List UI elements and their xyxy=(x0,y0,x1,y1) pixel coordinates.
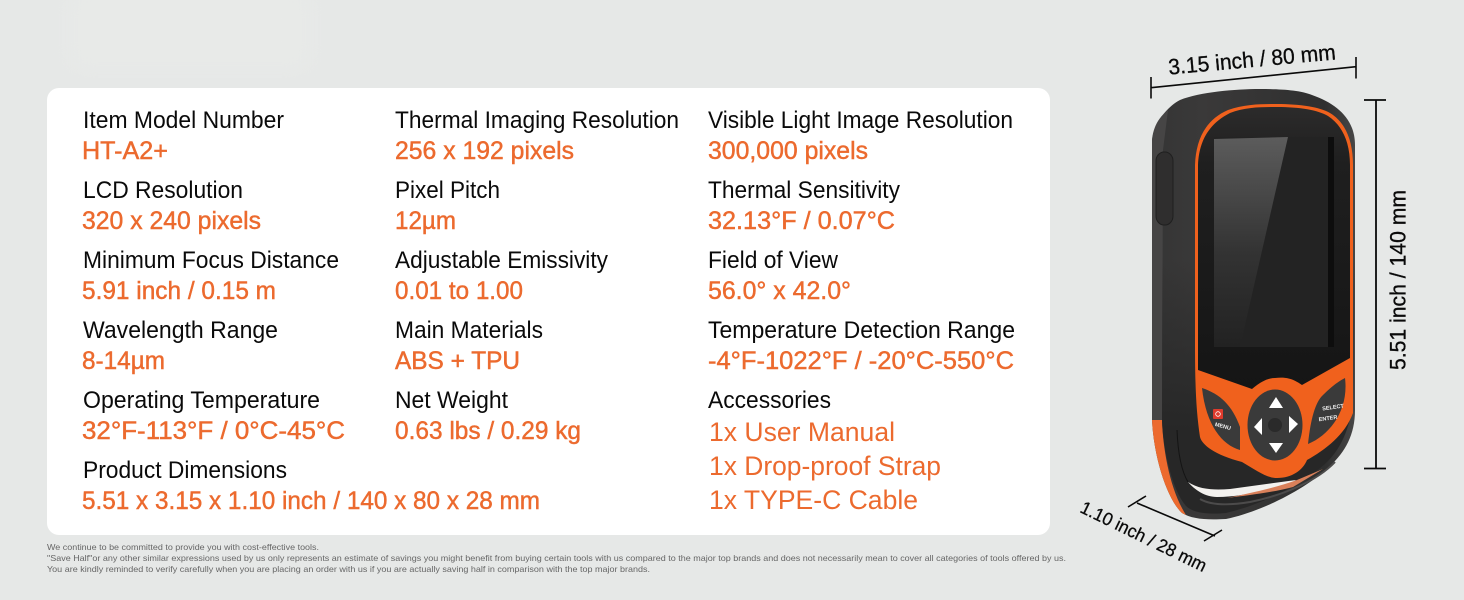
spec: temperature detection range: Temperature Detection Range xyxy=(708,317,1015,344)
side port cover xyxy=(1156,152,1173,225)
disclaimer text: "Save Half"or any other similar expressions used by us only represents an estimate of savings you might benefit from buying certain tools with us compared to the major top brands and does not necessarily mean to cover all categories of tools offered by us. xyxy=(47,553,1066,563)
spec: operating temperature: 32°F-113°F / 0°C-45°C xyxy=(82,417,345,445)
spec: operating temperature: Operating Temperature xyxy=(83,387,320,414)
spec: adjustable emissivity: 0.01 to 1.00 xyxy=(395,277,523,305)
spec: net weight: Net Weight xyxy=(395,387,508,414)
spec: adjustable emissivity xyxy=(395,247,608,305)
spec: adjustable emissivity: Adjustable Emissivity xyxy=(395,247,608,274)
black face xyxy=(1198,107,1350,389)
spec: main materials xyxy=(395,317,543,375)
dimension: depth: 1.10 inch / 28 mm xyxy=(1077,497,1210,576)
spec: visible light image resolution: Visible Light Image Resolution xyxy=(708,107,1013,134)
lower front shell xyxy=(1162,260,1355,514)
spec: LCD resolution xyxy=(82,177,261,235)
spec: thermal imaging resolution: Thermal Imaging Resolution xyxy=(395,107,679,134)
device body xyxy=(1152,89,1355,519)
spec: temperature detection range: -4°F-1022°F / -20°C-550°C xyxy=(708,347,1014,375)
spec: pixel pitch: 12µm xyxy=(395,207,456,235)
spec: item model number xyxy=(82,107,284,165)
left menu button xyxy=(1202,388,1240,450)
spec: LCD resolution: LCD Resolution xyxy=(83,177,243,204)
spec: operating temperature xyxy=(82,387,345,445)
spec: pixel pitch xyxy=(395,177,500,235)
disclaimer text: You are kindly reminded to verify carefully when you are placing an order with us if you are actually saving half in comparison with the top major brands. xyxy=(47,564,650,574)
spec: thermal imaging resolution: 256 x 192 pixels xyxy=(395,137,574,165)
spec: wavelength range xyxy=(82,317,278,375)
right select button xyxy=(1308,378,1346,444)
dimension: width: 3.15 inch / 80 mm xyxy=(1167,39,1337,80)
spec: temperature detection range xyxy=(708,317,1015,375)
spec: net weight xyxy=(395,387,581,445)
directional pad xyxy=(1248,390,1302,460)
spec: accessories: Accessories xyxy=(708,387,831,414)
spec: thermal sensitivity: Thermal Sensitivity xyxy=(708,177,900,204)
spec: wavelength range: Wavelength Range xyxy=(83,317,278,344)
spec: product dimensions: Product Dimensions xyxy=(83,457,287,484)
spec: visible light image resolution: 300,000 pixels xyxy=(708,137,868,165)
spec: thermal sensitivity: 32.13°F / 0.07°C xyxy=(708,207,895,235)
spec: product dimensions: 5.51 x 3.15 x 1.10 inch / 140 x 80 x 28 mm xyxy=(82,487,540,515)
spec: minimum focus distance: 5.91 inch / 0.15 m xyxy=(82,277,276,305)
spec: accessories: 1x Drop-proof Strap xyxy=(709,451,941,481)
spec: accessories: 1x User Manual xyxy=(709,417,895,447)
left menu button: MENU xyxy=(1214,422,1231,432)
screen xyxy=(1214,137,1334,347)
spec: main materials: ABS + TPU xyxy=(395,347,520,375)
spec: thermal imaging resolution xyxy=(395,107,679,165)
device: thermal imager xyxy=(1152,89,1355,519)
disclaimer text xyxy=(47,542,1066,574)
spec: field of view: Field of View xyxy=(708,247,839,274)
disclaimer text: We continue to be committed to provide you with cost-effective tools. xyxy=(47,542,319,552)
spec: minimum focus distance xyxy=(82,247,339,305)
spec: accessories xyxy=(708,387,941,515)
spec: net weight: 0.63 lbs / 0.29 kg xyxy=(395,417,581,445)
panel: specification table xyxy=(47,88,1050,535)
spec: field of view: 56.0° x 42.0° xyxy=(708,277,851,305)
side strip xyxy=(1152,110,1168,420)
strap loop xyxy=(1177,430,1335,504)
dimension: width xyxy=(1151,39,1356,98)
spec: accessories: 1x TYPE-C Cable xyxy=(709,485,918,515)
orange bezel xyxy=(1195,104,1353,478)
spec: visible light image resolution xyxy=(708,107,1013,165)
dimension: height: 5.51 inch / 140 mm xyxy=(1386,190,1410,370)
spec: field of view xyxy=(708,247,851,305)
right select button: SELECT xyxy=(1322,403,1345,412)
orange corner bumper xyxy=(1152,420,1186,515)
spec: minimum focus distance: Minimum Focus Distance xyxy=(83,247,339,274)
spec: wavelength range: 8-14µm xyxy=(82,347,165,375)
spec: LCD resolution: 320 x 240 pixels xyxy=(82,207,261,235)
spec: item model number: Item Model Number xyxy=(83,107,284,134)
spec: thermal sensitivity xyxy=(708,177,900,235)
spec: item model number: HT-A2+ xyxy=(82,137,168,165)
dimension: height xyxy=(1364,100,1410,468)
spec: main materials: Main Materials xyxy=(395,317,543,344)
right select button: ENTER xyxy=(1318,415,1338,423)
spec: product dimensions xyxy=(82,457,540,515)
spec: pixel pitch: Pixel Pitch xyxy=(395,177,500,204)
